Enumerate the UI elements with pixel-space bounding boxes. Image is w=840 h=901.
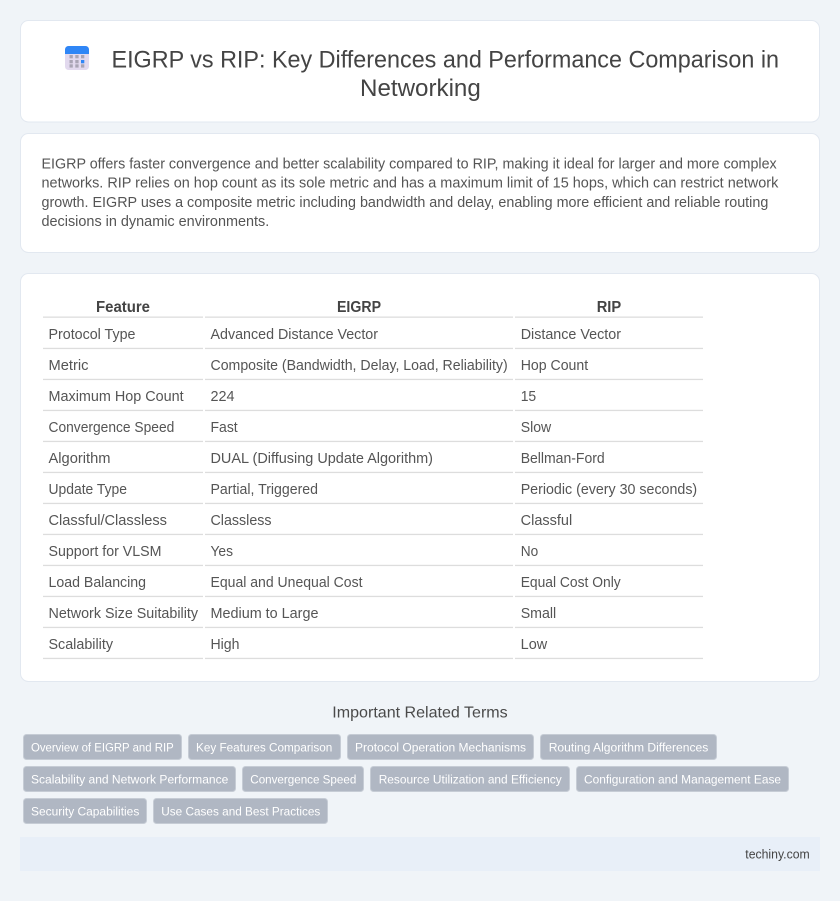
tag: use cases: Use Cases and Best Practices: [161, 804, 320, 818]
tag: routing algorithm: [540, 734, 716, 760]
row: load balancing: Load Balancing: [48, 575, 146, 591]
tag: resource utilization: Resource Utilization and Efficiency: [379, 772, 563, 786]
row: update type: Periodic (every 30 seconds): [521, 482, 697, 498]
tag: key features: [188, 734, 340, 760]
footer: [20, 837, 820, 871]
row: scalability: Low: [521, 637, 548, 653]
row: support for VLSM: No: [521, 544, 538, 560]
icon: calendar: [65, 46, 89, 70]
intro text: networks. RIP relies on hop count as its sole metric and has a maximum limit of 15 hops, which can restrict network: [42, 175, 779, 191]
intro text: decisions in dynamic environments.: [42, 214, 269, 230]
row: convergence speed: Convergence Speed: [48, 420, 174, 436]
row: maximum hop count: [43, 389, 703, 411]
tag: routing algorithm: Routing Algorithm Differences: [549, 740, 708, 754]
heading: important related terms: Important Related Terms: [332, 704, 508, 721]
tag: convergence speed: [242, 766, 364, 792]
row: protocol type: Advanced Distance Vector: [210, 327, 378, 343]
row: metric: Hop Count: [521, 358, 588, 374]
table header row: [43, 299, 703, 318]
row: protocol type: [43, 327, 703, 349]
row: network size suitability: Small: [521, 606, 556, 622]
tag: scalability: Scalability and Network Performance: [31, 772, 229, 786]
row: network size suitability: Medium to Large: [210, 606, 318, 622]
row: scalability: Scalability: [48, 637, 114, 653]
row: support for VLSM: Support for VLSM: [48, 544, 162, 560]
row: maximum hop count: 224: [210, 389, 234, 405]
tag: protocol operation: Protocol Operation Mechanisms: [355, 740, 526, 754]
row: algorithm: Algorithm: [48, 451, 111, 467]
panel: header: [20, 20, 820, 122]
row: algorithm: Bellman-Ford: [521, 451, 605, 467]
row: protocol type: Protocol Type: [48, 327, 136, 343]
row: load balancing: Equal Cost Only: [521, 575, 621, 591]
row: algorithm: DUAL (Diffusing Update Algorithm): [210, 451, 433, 467]
row: network size suitability: Network Size Suitability: [48, 606, 199, 622]
related term tags: [24, 734, 788, 824]
footer source text: techiny.com: [745, 846, 810, 861]
row: convergence speed: Slow: [521, 420, 552, 436]
row: load balancing: [43, 575, 703, 597]
row: support for VLSM: [43, 544, 703, 566]
row: update type: [43, 482, 703, 504]
tag: key features: Key Features Comparison: [196, 740, 332, 754]
tag: convergence speed: Convergence Speed: [250, 772, 356, 786]
title: EIGRP vs RIP: Key Differences and Performance Comparison in: [112, 46, 779, 73]
tag: security: Security Capabilities: [31, 804, 139, 818]
tag: resource utilization: [370, 766, 570, 792]
row: convergence speed: [43, 420, 703, 442]
tag: protocol operation: [348, 734, 534, 760]
panel: introduction: [20, 134, 820, 252]
row: update type: Partial, Triggered: [210, 482, 318, 498]
table header row: RIP: [597, 299, 622, 316]
row: maximum hop count: Maximum Hop Count: [48, 389, 184, 405]
panel: comparison table: [20, 274, 820, 682]
tag: configuration: [576, 766, 788, 792]
row: scalability: High: [210, 637, 240, 653]
row: protocol type: Distance Vector: [521, 327, 621, 343]
title: Networking: [360, 75, 481, 102]
tag: scalability: [24, 766, 236, 792]
title: [112, 46, 779, 102]
row: maximum hop count: 15: [521, 389, 536, 405]
table header row: EIGRP: [337, 299, 381, 316]
intro text: EIGRP offers faster convergence and better scalability compared to RIP, making it ideal for larger and more complex: [42, 156, 777, 172]
row: classful/classless: Classful: [521, 513, 572, 529]
row: classful/classless: Classful/Classless: [48, 513, 167, 529]
row: metric: [43, 358, 703, 380]
row: metric: Metric: [48, 358, 88, 374]
row: convergence speed: Fast: [210, 420, 238, 436]
row: network size suitability: [43, 606, 703, 628]
row: metric: Composite (Bandwidth, Delay, Load, Reliability): [210, 358, 508, 374]
row: support for VLSM: Yes: [210, 544, 233, 560]
row: scalability: [43, 637, 703, 659]
tag: configuration: Configuration and Management Ease: [584, 772, 781, 786]
tag: overview: [24, 734, 182, 760]
tag: overview: Overview of EIGRP and RIP: [31, 740, 174, 754]
row: update type: Update Type: [48, 482, 127, 498]
intro text: [42, 156, 779, 230]
tag: security: [24, 798, 146, 824]
tag: use cases: [154, 798, 328, 824]
row: classful/classless: [43, 513, 703, 535]
row: classful/classless: Classless: [210, 513, 272, 529]
row: load balancing: Equal and Unequal Cost: [210, 575, 362, 591]
table header row: Feature: [96, 299, 150, 316]
intro text: growth. EIGRP uses a composite metric including bandwidth and delay, enabling more efficient and reliable routing: [42, 195, 768, 211]
row: algorithm: [43, 451, 703, 473]
